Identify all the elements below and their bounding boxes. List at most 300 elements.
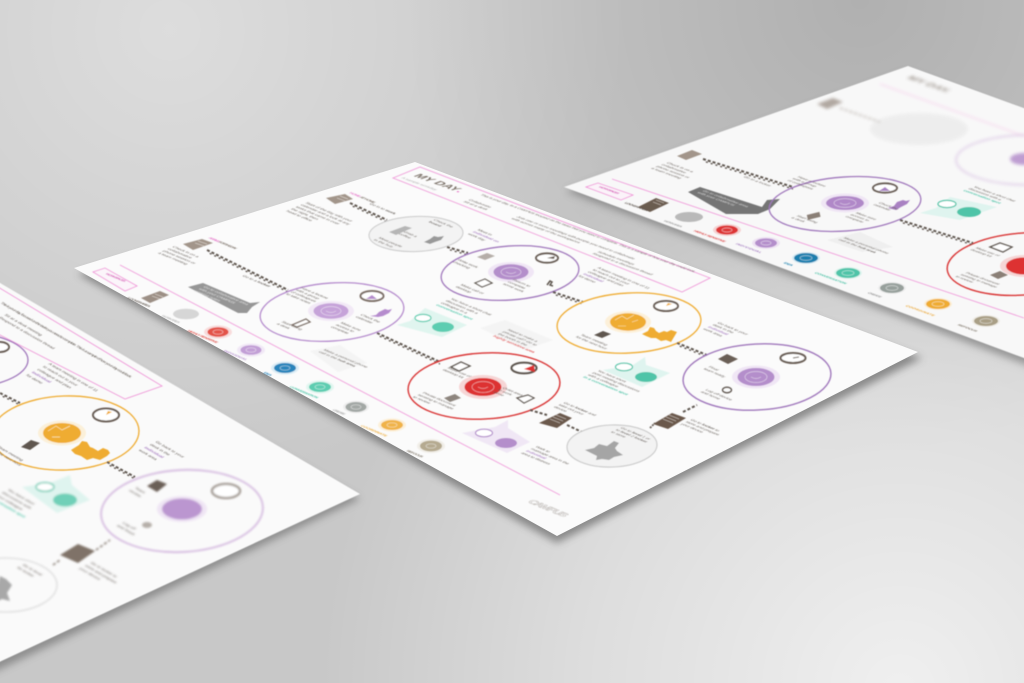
right sheet near content — [586, 150, 1024, 332]
legend — [623, 198, 1000, 332]
task notes: desktop kit — [441, 369, 466, 379]
purple circle — [99, 466, 265, 556]
purple circle right — [681, 340, 833, 414]
red circle: sensing to manage — [959, 274, 1000, 288]
yellow circle — [556, 289, 702, 357]
dark callout — [688, 187, 780, 214]
legend individual — [752, 237, 780, 249]
header: Respond to a discussion thread — [591, 253, 655, 276]
purple activity — [1010, 153, 1024, 165]
legend refocus — [972, 315, 1000, 327]
notes: Final — [707, 366, 720, 371]
bubble text: conversation spot — [962, 189, 1003, 204]
legend locker label: LOCKER AREA — [623, 202, 650, 212]
arrive locker — [677, 150, 702, 160]
tablet icon — [807, 212, 821, 220]
meeting text: colleague and plan — [36, 368, 74, 389]
red locker text: device — [553, 406, 569, 413]
legend locker label: LOCKER AREA — [126, 297, 153, 308]
bubble text: discussion with a — [967, 188, 1004, 201]
focus activity — [157, 496, 207, 522]
connector — [0, 393, 20, 405]
envelope — [147, 480, 167, 492]
legend conversation label: CONVERSATION — [813, 272, 849, 285]
sheet: right poster — [564, 66, 1024, 370]
header — [393, 167, 710, 292]
sheet: main poster — [74, 162, 922, 543]
purple circle left: complete — [330, 326, 351, 335]
grey start circle: coffee — [397, 233, 413, 239]
header intro: This is your day, in a CAMPUS focused on the tasks that you need to complete. This is a sample of how your day could look. — [479, 194, 698, 273]
power icon — [142, 522, 152, 528]
legend refocus label: REFOCUS — [405, 450, 425, 458]
legend refocus label: REFOCUS — [956, 324, 980, 332]
purple circle with tasks: Check the — [877, 202, 901, 210]
right sheet far content — [817, 75, 1024, 185]
header: Schedule meetings — [596, 251, 636, 265]
grey splat — [585, 441, 623, 460]
home text: calendar and a look at any — [299, 204, 353, 226]
bubble text: discussion with a — [444, 300, 480, 315]
meeting text: to reach out to your — [42, 365, 80, 387]
lower bubble text: in a conversation spot — [582, 376, 630, 396]
legend highly sensitive — [204, 325, 232, 339]
phone call note: Make a personal phone — [322, 349, 370, 368]
people icon — [642, 327, 677, 342]
phone call note — [827, 232, 893, 256]
red locker — [539, 413, 572, 428]
camera icon — [21, 440, 40, 450]
red circle — [406, 349, 562, 423]
purple circle right: and home — [699, 391, 723, 400]
legend conversation — [306, 380, 334, 394]
grey circle note: for locker — [16, 566, 36, 578]
private call note: highly sensitive area — [492, 335, 537, 354]
go to lockers text: Go to a locker — [241, 275, 273, 288]
main sheet shadow — [78, 170, 922, 543]
purple circle with tasks: Start using — [795, 215, 820, 224]
team meeting text: individual — [582, 273, 605, 282]
workspaces tag — [586, 183, 633, 200]
title: MY DAY. — [903, 75, 954, 94]
purple circle left: Make sure — [339, 322, 363, 332]
meeting text: for demo — [25, 374, 45, 385]
purple circle with tasks: complete — [844, 215, 866, 223]
header frame — [0, 287, 162, 399]
purple circle left: a desk — [275, 323, 293, 330]
red circle: to review — [954, 275, 976, 283]
connector — [107, 462, 135, 479]
back to desk text: work area — [702, 328, 725, 337]
phone call note: call in the hub area — [317, 351, 357, 367]
legend highly sensitive — [713, 224, 741, 236]
right sheet shadow — [566, 72, 1024, 370]
header text: This is your day, focused on the tasks you need to complete. This is a sample of how your day could look. — [0, 301, 134, 379]
arrive text: phone session or — [162, 250, 198, 265]
purple circle top: Make call or — [459, 284, 486, 295]
home locker — [326, 194, 353, 204]
red circle: desktop kit — [969, 249, 994, 258]
lilac text: massage area in the — [529, 448, 572, 465]
home text: the night, then — [290, 208, 321, 221]
header bullets: Sit at a desk — [462, 201, 491, 211]
locker note: store and prepare — [84, 564, 119, 584]
legend create label: CREATE — [866, 292, 884, 298]
arrive locker — [183, 239, 213, 250]
red locker text: Go to locker and — [562, 402, 598, 416]
purple circle top: some work — [502, 283, 527, 293]
meeting text: individual — [30, 371, 53, 383]
red circle: to work — [496, 389, 515, 396]
right locker — [653, 413, 686, 429]
focus activity — [488, 262, 534, 282]
red circle: alone — [492, 391, 507, 397]
back to desk text: desk in the — [149, 443, 172, 456]
purple circle top — [439, 241, 581, 305]
start notes: Check the — [432, 219, 456, 228]
team meeting text: for demo — [577, 275, 598, 284]
monitor icon — [451, 362, 470, 371]
red circle: to review — [412, 396, 433, 405]
task texts: of colleagues — [786, 179, 815, 190]
legend — [126, 291, 445, 458]
team meeting text: to reach out to your — [591, 269, 632, 285]
note: to store — [610, 431, 628, 438]
connector — [447, 247, 468, 255]
left sheet paper — [0, 280, 360, 664]
grey circle — [0, 558, 57, 612]
bubble text: You have a short chat — [972, 186, 1018, 202]
purple circle with tasks: Make sure — [854, 212, 879, 221]
legend work area label: WORK AREA — [662, 220, 685, 228]
red circle: Private document — [421, 392, 458, 407]
grey start circle: Grab a — [402, 231, 420, 238]
connector — [677, 343, 707, 357]
sheet: left poster — [0, 280, 360, 674]
home text: tasks that came in over — [295, 206, 342, 225]
red locker text: take out your — [557, 404, 586, 415]
arrive connector — [207, 250, 288, 292]
task notes: Have a lecture — [299, 287, 331, 300]
tablet icon — [444, 394, 461, 402]
purple circle with tasks — [767, 172, 923, 236]
legend locker — [638, 198, 669, 212]
dark callout: with your CAMPUS — [197, 288, 237, 304]
keyboard icon — [477, 253, 495, 260]
back to desk text: individual — [143, 446, 165, 459]
lilac text: Walk to — [534, 446, 553, 453]
lower connector — [377, 333, 440, 364]
legend coordinate — [378, 418, 406, 432]
connectors by locker — [530, 405, 697, 432]
icon: people — [424, 236, 444, 244]
legend idea label: IDEA — [782, 262, 795, 266]
phone call note: Make a personal phone — [842, 237, 891, 254]
monitor icon — [475, 279, 492, 287]
arrive text: phone session or — [655, 165, 692, 179]
lower bubble text: You have short — [596, 370, 629, 383]
bubble text: discussions with — [1, 491, 34, 510]
device — [990, 243, 1012, 252]
lilac text: individual — [525, 450, 548, 459]
start notes: board — [427, 221, 444, 227]
legend idea — [792, 252, 820, 264]
grey home circle — [870, 113, 968, 145]
pink divider — [612, 179, 1024, 318]
legend idea — [271, 361, 299, 375]
teal bubble — [22, 475, 90, 513]
icon: bed — [389, 226, 412, 235]
header frame — [393, 167, 710, 292]
clock — [873, 183, 897, 193]
header: with across many of the workspaces — [510, 218, 582, 244]
legend create — [343, 401, 369, 413]
home text: head to office — [285, 210, 315, 222]
clock — [512, 363, 536, 373]
red circle: Quiet area — [501, 387, 525, 397]
back to desk text: Go back to your — [716, 322, 750, 336]
bubble text: You have a short chat — [449, 298, 494, 316]
back to desk text: desk in the — [711, 324, 736, 334]
team note: Team meeting — [579, 334, 610, 346]
right locker text: Go to locker to — [689, 419, 721, 432]
title: MY DAY. — [410, 173, 467, 193]
dark callout: Go to collaborative area — [701, 190, 751, 208]
notes: review — [128, 489, 144, 498]
right locker text: your device — [680, 423, 706, 433]
meet text: individual on — [471, 231, 501, 243]
note: Go to level 1 or — [619, 427, 652, 440]
legend coordinate label: COORDINATE — [359, 425, 390, 437]
campus logo: CAMPUS — [524, 499, 571, 518]
clock — [654, 301, 678, 311]
private call note: Need to make a — [506, 329, 540, 343]
legend highly sensitive label: HIGHLY SENSITIVE — [692, 230, 728, 243]
purple circle top: Return to — [511, 279, 533, 288]
grey start circle — [368, 215, 464, 253]
legend create — [878, 282, 906, 294]
clock — [93, 408, 119, 422]
private call note: the booth in the — [497, 333, 530, 346]
legend individual label: INDIVIDUAL — [734, 243, 765, 254]
legend create label: CREATE — [331, 409, 348, 415]
focus activity — [732, 366, 780, 388]
lilac bubble — [462, 420, 530, 453]
clock partial — [0, 342, 9, 352]
meet text: work day — [467, 233, 488, 242]
device icon — [517, 395, 534, 403]
legend work area — [173, 309, 199, 319]
header: Join one or more meetings with people you need to collaborate — [515, 216, 638, 260]
task notes: of colleagues — [290, 291, 318, 302]
task notes: to take notes — [285, 293, 313, 304]
locker note: Go to locker to — [89, 561, 119, 578]
back to desk text: Go back to your — [154, 440, 186, 459]
purple circle cut off — [0, 332, 28, 388]
home connector — [350, 203, 387, 222]
figure icon — [888, 200, 910, 210]
workspaces tag: WORKSPACES — [104, 273, 128, 283]
connector arrows — [53, 540, 110, 565]
legend coordinate — [924, 298, 952, 310]
task texts: Have a lecture — [796, 176, 828, 187]
grey circle note: Go to level — [21, 563, 44, 576]
home heading: HOME AT HOME — [348, 192, 378, 204]
coordinate activity — [38, 420, 86, 446]
notes: Team — [133, 486, 147, 494]
bubble text: colleague in a — [440, 302, 470, 314]
legend individual label: INDIVIDUAL — [222, 350, 250, 361]
purple circle: and finish — [116, 524, 137, 536]
focus activity — [308, 301, 354, 321]
notes: team ready — [702, 368, 728, 378]
clock — [212, 484, 240, 498]
dark callout: working notes — [193, 290, 222, 302]
legend work area label: WORK AREA — [160, 315, 182, 324]
teal bubble lower — [603, 357, 670, 387]
legend individual — [237, 343, 265, 357]
tablet — [990, 271, 1008, 279]
red circle — [945, 228, 1024, 300]
left sheet lower content — [0, 466, 265, 612]
left sheet upper content — [0, 287, 186, 479]
meeting text: A team meeting in one of 11 — [47, 362, 100, 393]
purple circle left: Check the — [359, 314, 383, 323]
grey start circle: in the hub — [372, 239, 395, 248]
arrive text: collaborative — [660, 164, 689, 174]
sensitive activity — [459, 375, 507, 399]
legend conversation — [834, 267, 862, 279]
red circle: Make use of — [974, 247, 1002, 257]
locker — [60, 544, 95, 563]
yellow circle — [0, 393, 140, 473]
private call note — [480, 320, 553, 354]
phone call note: call in the hub area — [837, 239, 878, 253]
purple circle with tasks: a desk — [790, 217, 808, 223]
task notes: with a group — [294, 289, 322, 300]
arrive connector — [703, 159, 793, 189]
bubble text: You have short — [6, 488, 37, 506]
envelope — [718, 354, 738, 364]
task notes: Write work — [456, 259, 481, 269]
figure icon — [370, 309, 392, 317]
legend idea label: IDEA — [262, 372, 274, 376]
legend conversation label: CONVERSATION — [288, 386, 320, 399]
coordinate activity — [605, 311, 651, 333]
legend coordinate label: COORDINATE — [904, 305, 937, 317]
focus activity — [821, 194, 869, 212]
purple circle left: calendar — [354, 316, 375, 324]
main sheet paper — [74, 162, 918, 536]
phone call note — [310, 345, 370, 372]
task texts: with a group — [791, 178, 819, 188]
home text: Start of the day with your — [304, 202, 355, 222]
dark callout: Go to collaborative area — [202, 286, 251, 306]
purple circle left — [258, 278, 406, 346]
legend locker — [141, 291, 169, 303]
dark callout — [188, 283, 260, 313]
locker note: your device — [78, 567, 103, 581]
phone icon — [547, 281, 553, 286]
arrive text: Check in on a — [171, 246, 201, 258]
grey start circle: Meet people — [377, 237, 405, 248]
connector — [553, 292, 583, 304]
back to desk text: individual — [707, 326, 730, 335]
teal bubble — [397, 308, 467, 337]
arrive text: a team meeting — [650, 167, 684, 179]
note: to level 2 locker — [614, 429, 649, 443]
header bullets: Collaborate — [467, 199, 494, 208]
team meeting text: A team meeting in one of 11 — [596, 267, 652, 290]
teal bubble — [920, 197, 997, 220]
red activity — [1000, 255, 1024, 277]
task notes: Make use of — [446, 367, 474, 378]
red circle: sensing to manage — [416, 394, 456, 410]
workspaces tag — [93, 268, 137, 291]
purple circle top — [956, 135, 1024, 185]
arrive heading: ARRIVE FOR THE DAY — [207, 237, 239, 250]
clock — [536, 253, 558, 263]
red circle: Private document — [964, 272, 1002, 285]
people icon — [71, 441, 110, 460]
header bullets: Sit at a desk meeting — [3, 313, 44, 337]
lower bubble text: with a colleague — [587, 374, 621, 388]
bubble text: conversation spot — [435, 304, 475, 320]
grey splat — [0, 576, 12, 602]
right locker text: store and prepare — [684, 421, 722, 436]
connector — [840, 108, 880, 122]
legend refocus — [417, 439, 445, 453]
clock — [780, 353, 806, 363]
legend work area — [675, 212, 703, 222]
lilac text: area to distress — [520, 452, 552, 465]
purple circle with tasks: calendar — [872, 204, 893, 211]
workspaces tag: WORKSPACES — [597, 186, 622, 195]
private call note: private call? Go to — [501, 331, 540, 346]
go to lockers text: Go to a locker — [742, 176, 773, 187]
header subtitle: A sample workday — [400, 177, 440, 191]
purple circle top: desktop — [454, 286, 474, 294]
clock — [360, 291, 384, 301]
left sheet shadow — [0, 286, 360, 674]
header frame — [880, 84, 1024, 136]
lower bubble text: post meeting discussions — [591, 372, 642, 392]
purple circle with tasks: access to — [849, 214, 872, 222]
purple circle top: complete — [506, 281, 528, 290]
purple circle right: Log off device — [704, 389, 735, 401]
camera icon — [594, 331, 611, 338]
meet text: Meet in — [476, 229, 495, 236]
legend highly sensitive label: HIGHLY SENSITIVE — [186, 330, 220, 344]
team note: for the next hour — [574, 336, 609, 350]
back to desk text: work area — [137, 449, 159, 461]
go to hub text: Go in to work — [368, 203, 398, 215]
main sheet content — [93, 167, 833, 518]
arrive text: collaborative — [166, 248, 194, 259]
grey end circle — [566, 423, 658, 469]
purple circle: Log off — [121, 521, 138, 531]
dark callout: with your CAMPUS — [696, 192, 737, 206]
arrive text: a team meeting — [157, 252, 190, 265]
team meeting text: colleague and plan — [587, 271, 626, 287]
pink divider — [120, 265, 560, 495]
power icon — [722, 387, 732, 393]
arrive text: Check in on a — [665, 162, 696, 173]
task notes: checking — [451, 261, 473, 269]
lower connector — [900, 220, 973, 245]
tablet icon — [292, 319, 310, 327]
top locker — [817, 98, 843, 109]
